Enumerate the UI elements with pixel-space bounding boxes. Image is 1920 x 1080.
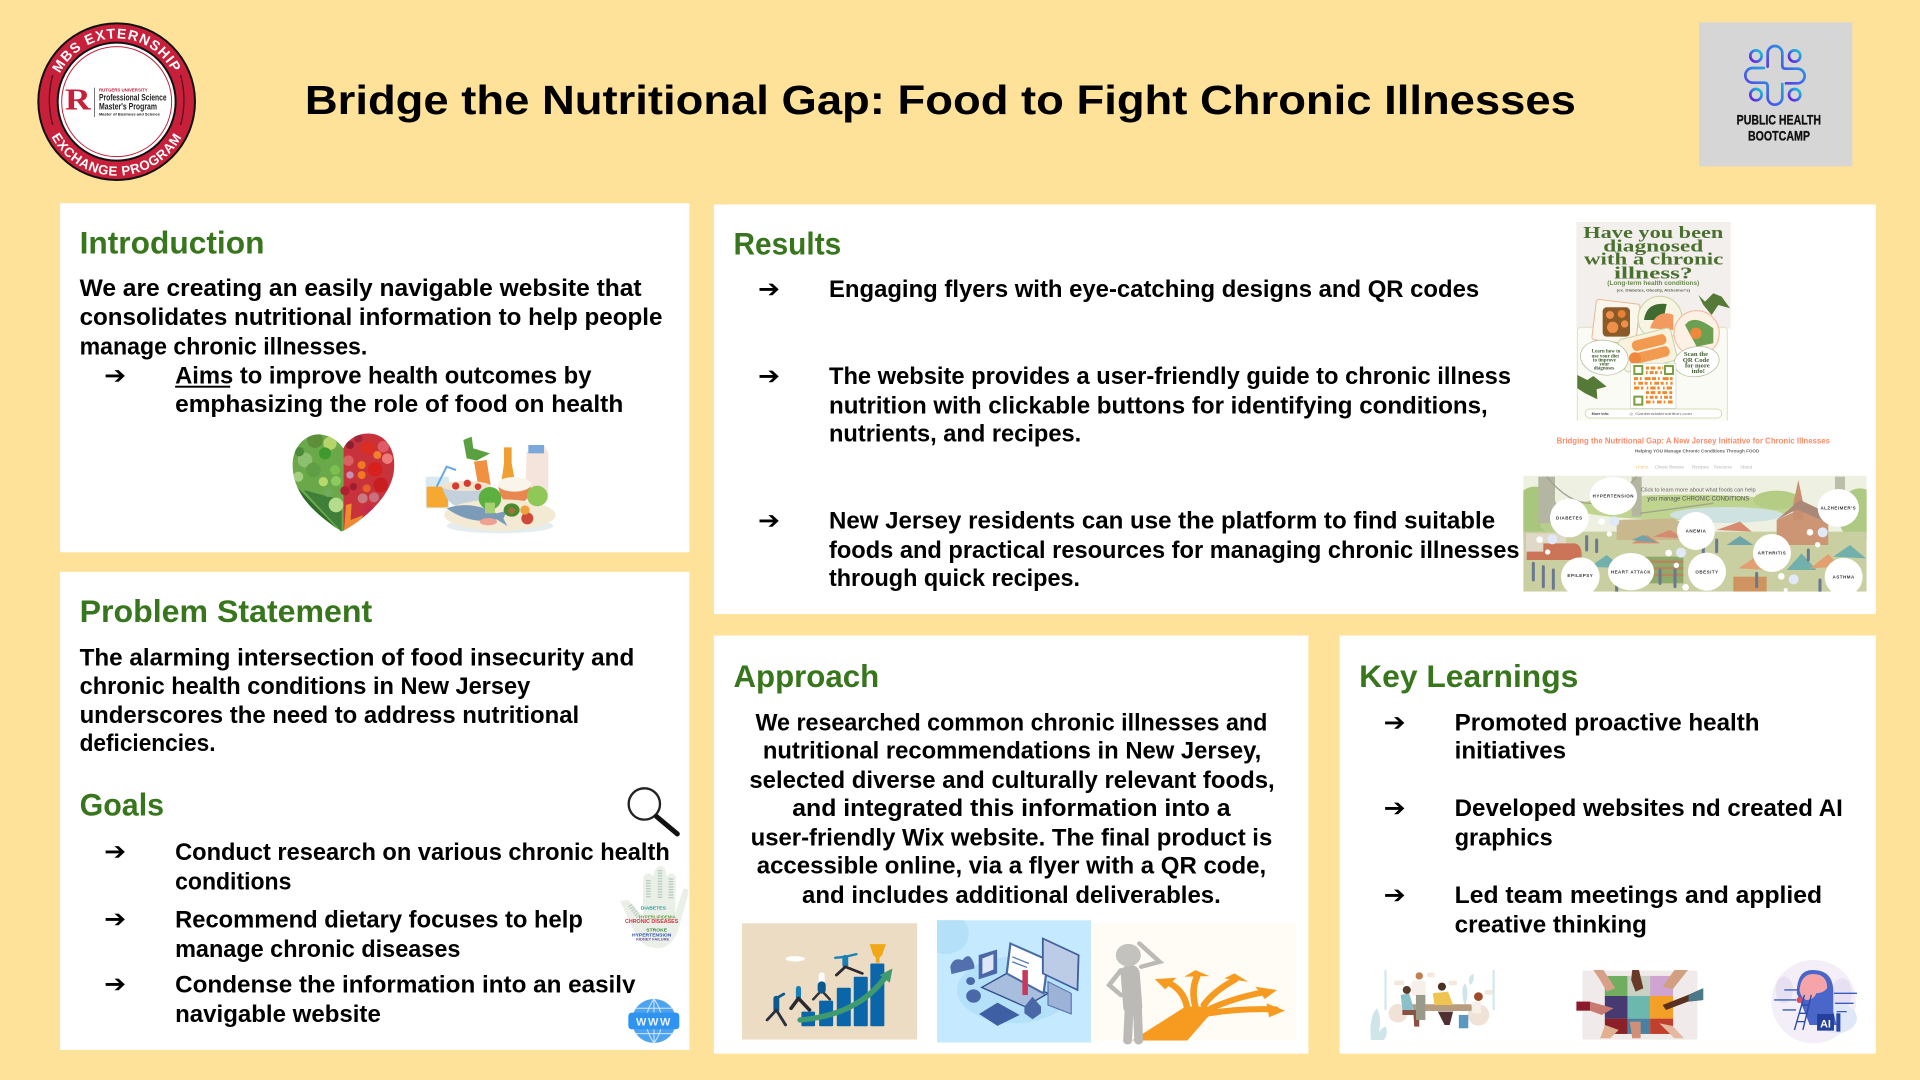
goal 1 bbox=[104, 837, 670, 896]
introduction paragraph: manage chronic illnesses. bbox=[80, 333, 367, 360]
logo: public health bootcamp: BOOTCAMP bbox=[1748, 129, 1810, 144]
introduction paragraph: We are creating an easily navigable website that bbox=[80, 275, 642, 302]
learning 1: Promoted proactive health bbox=[1455, 709, 1760, 736]
icon: chronic diseases hand bbox=[620, 866, 688, 948]
icon: chronic diseases hand: STROKE bbox=[646, 928, 668, 934]
panel: problem statement and goals bbox=[60, 572, 689, 1050]
flyer: have you been diagnosed: diagnosed bbox=[1603, 236, 1704, 255]
website screenshot: Recipes bbox=[1692, 465, 1709, 470]
result 1: ➔ bbox=[758, 274, 780, 303]
QR code bbox=[1631, 363, 1676, 408]
logo: MBS externship badge: Master's Program bbox=[99, 102, 157, 112]
website screenshot: DIABETES bbox=[1556, 516, 1583, 521]
flyer: have you been diagnosed: diagnoses bbox=[1594, 366, 1614, 371]
icon: chronic diseases hand: DIABETES bbox=[641, 905, 667, 911]
heading: key learnings: Key Learnings bbox=[1359, 658, 1578, 694]
goal 3: navigable website bbox=[175, 1001, 381, 1028]
result 2: nutrients, and recipes. bbox=[829, 420, 1081, 447]
flyer: have you been diagnosed: More Info: bbox=[1592, 412, 1609, 416]
icon: www globe: WWW bbox=[636, 1017, 672, 1029]
learning 1: ➔ bbox=[1384, 707, 1406, 736]
flyer: have you been diagnosed: illness? bbox=[1614, 263, 1693, 282]
website screenshot: About bbox=[1740, 465, 1753, 470]
illustration: team climbing bar chart bbox=[742, 923, 917, 1040]
result 1: Engaging flyers with eye-catching designs and QR codes bbox=[829, 276, 1479, 303]
heading: problem statement: Problem Statement bbox=[80, 593, 373, 629]
approach paragraph bbox=[749, 709, 1275, 909]
learning 3: ➔ bbox=[1384, 880, 1406, 909]
illustration: laptop isometric bbox=[937, 920, 1092, 1042]
website screenshot: Resources bbox=[1714, 465, 1733, 470]
flyer: have you been diagnosed: info! bbox=[1692, 368, 1705, 375]
panel: approach bbox=[714, 636, 1308, 1054]
flyer: have you been diagnosed: use your diet bbox=[1592, 354, 1619, 359]
result 3: foods and practical resources for managing chronic illnesses bbox=[829, 537, 1520, 564]
goal 1: ➔ bbox=[104, 837, 126, 866]
flyer: have you been diagnosed bbox=[1576, 222, 1731, 422]
learning 2: Developed websites nd created AI bbox=[1455, 795, 1843, 822]
results card bbox=[714, 204, 1876, 614]
website screenshot: you manage CHRONIC CONDITIONS bbox=[1647, 497, 1749, 503]
website screenshot: OBESITY bbox=[1695, 569, 1719, 574]
website screenshot: ALZHEIMER'S bbox=[1820, 506, 1856, 511]
illustration: AI brain head bbox=[1771, 960, 1857, 1043]
logo: MBS externship badge: RUTGERS UNIVERSITY bbox=[99, 88, 148, 93]
website screenshot: HYPERTENSION bbox=[1593, 494, 1634, 499]
illustration: team meeting bbox=[1370, 970, 1494, 1040]
aims bullet bbox=[175, 362, 623, 418]
result 3: through quick recipes. bbox=[829, 565, 1080, 592]
website screenshot: Chronic Illnesses bbox=[1655, 465, 1685, 470]
icon: chronic diseases hand: HYPERTENSION bbox=[632, 932, 672, 938]
website screenshot: EPILEPSY bbox=[1567, 573, 1593, 578]
approach paragraph: accessible online, via a flyer with a QR code, bbox=[757, 853, 1266, 880]
flyer: have you been diagnosed: Have you been bbox=[1583, 223, 1724, 242]
key learnings card bbox=[1340, 636, 1876, 1054]
result 3: ➔ bbox=[758, 505, 780, 534]
problem statement paragraph: The alarming intersection of food insecurity and bbox=[80, 645, 634, 672]
logo: public health bootcamp bbox=[1699, 22, 1852, 166]
approach paragraph: user-friendly Wix website. The final product is bbox=[751, 825, 1272, 852]
problem statement paragraph: underscores the need to address nutritional bbox=[80, 702, 579, 729]
flyer: have you been diagnosed: your bbox=[1599, 363, 1610, 368]
website screenshot bbox=[1523, 438, 1867, 592]
result 3: New Jersey residents can use the platform to find suitable bbox=[829, 507, 1495, 534]
learning 2 bbox=[1384, 793, 1843, 852]
website screenshot: Click to learn more about what foods can help bbox=[1641, 488, 1756, 494]
introduction paragraph bbox=[80, 275, 662, 360]
introduction card bbox=[60, 203, 689, 552]
learning 1: initiatives bbox=[1455, 738, 1566, 765]
goal 2: Recommend dietary focuses to help bbox=[175, 907, 583, 934]
icon: www globe bbox=[628, 999, 679, 1043]
icon: healthy food plate bbox=[426, 437, 556, 533]
panel: results bbox=[714, 204, 1882, 614]
icon: chronic diseases hand: CHRONIC DISEASES bbox=[625, 919, 679, 925]
result 2: nutrition with clickable buttons for identifying conditions, bbox=[829, 392, 1488, 419]
website screenshot: ASTHMA bbox=[1833, 575, 1855, 580]
flyer: have you been diagnosed: ◎ Gardenstatenutrition.com bbox=[1629, 412, 1692, 416]
problem statement paragraph: deficiencies. bbox=[80, 730, 216, 757]
learning 2: graphics bbox=[1455, 825, 1553, 852]
learning 3: creative thinking bbox=[1455, 911, 1647, 938]
goal 3 bbox=[104, 969, 643, 1028]
goal 2: ➔ bbox=[104, 904, 126, 933]
website screenshot: Helping YOU Manage Chronic Conditions Through FOOD bbox=[1635, 449, 1760, 455]
icon: magnifying glass bbox=[629, 788, 677, 834]
logo: MBS externship badge: MBS EXTERNSHIP bbox=[52, 28, 180, 73]
flyer: have you been diagnosed: (Long-term health conditions) bbox=[1607, 281, 1699, 287]
problem statement card bbox=[60, 572, 689, 1050]
logo: MBS externship badge: EXCHANGE PROGRAM bbox=[52, 132, 182, 176]
approach paragraph: and includes additional deliverables. bbox=[802, 882, 1221, 909]
title: Bridge the Nutritional Gap: Food to Fight Chronic Illnesses bbox=[305, 77, 1576, 123]
problem statement paragraph: chronic health conditions in New Jersey bbox=[80, 673, 531, 700]
flyer: have you been diagnosed: with a chronic bbox=[1584, 250, 1723, 269]
website screenshot: ANEMIA bbox=[1686, 529, 1707, 534]
logo: MBS externship badge: R bbox=[65, 82, 92, 116]
icon: chronic diseases hand: KIDNEY FAILURE bbox=[636, 936, 670, 941]
logo: MBS externship badge: Professional Science bbox=[99, 92, 167, 102]
aims bullet: emphasizing the role of food on health bbox=[175, 391, 623, 418]
flyer: have you been diagnosed: Learn how to bbox=[1592, 350, 1621, 355]
flyer: have you been diagnosed: QR Code bbox=[1683, 357, 1709, 364]
flyer: have you been diagnosed: for more bbox=[1685, 363, 1710, 370]
arrow bullet: ➔ bbox=[104, 360, 126, 389]
result 2: ➔ bbox=[758, 361, 780, 390]
heading: results: Results bbox=[733, 226, 841, 262]
website hero scene bbox=[1512, 476, 1882, 592]
aims bullet: Aims to improve health outcomes by bbox=[175, 362, 592, 389]
logo: MBS externship badge: Master of Business and Science bbox=[99, 112, 161, 117]
approach paragraph: We researched common chronic illnesses and bbox=[756, 709, 1267, 736]
learning 3 bbox=[1384, 880, 1822, 938]
heading: goals: Goals bbox=[80, 787, 164, 823]
learning 2: ➔ bbox=[1384, 793, 1406, 822]
website screenshot: Bridging the Nutritional Gap: A New Jersey Initiative for Chronic Illnesses bbox=[1557, 436, 1831, 445]
goal 2: manage chronic diseases bbox=[175, 936, 460, 963]
website screenshot: Home bbox=[1636, 465, 1649, 470]
panel: key learnings bbox=[1340, 636, 1876, 1054]
approach paragraph: and integrated this information into a bbox=[792, 795, 1231, 822]
approach card bbox=[714, 636, 1308, 1054]
goal 3: ➔ bbox=[104, 969, 126, 998]
illustration: puzzle hands bbox=[1576, 970, 1703, 1040]
result 3 bbox=[758, 505, 1520, 592]
goal 2 bbox=[104, 904, 583, 963]
flyer: have you been diagnosed: (ex. Diabetes, Obesity, Alzheimer's) bbox=[1617, 287, 1691, 292]
icon: heart of vegetables bbox=[290, 430, 397, 533]
illustration: figure choosing arrows bbox=[1091, 923, 1296, 1041]
flyer: have you been diagnosed: to improve bbox=[1593, 359, 1617, 364]
approach paragraph: nutritional recommendations in New Jersey, bbox=[763, 738, 1261, 765]
heading: approach: Approach bbox=[733, 658, 879, 694]
approach paragraph: selected diverse and culturally relevant foods, bbox=[749, 767, 1275, 794]
panel: introduction bbox=[60, 203, 689, 552]
website screenshot: HEART ATTACK bbox=[1611, 569, 1651, 574]
goal 3: Condense the information into an easily bbox=[175, 971, 636, 998]
illustration: AI brain head: AI bbox=[1820, 1018, 1831, 1030]
logo: public health bootcamp: PUBLIC HEALTH bbox=[1737, 112, 1821, 127]
learning 1 bbox=[1384, 707, 1760, 765]
website screenshot: ARTHRITIS bbox=[1758, 551, 1786, 556]
goal 1: Conduct research on various chronic health bbox=[175, 839, 670, 866]
goal 1: conditions bbox=[175, 869, 291, 896]
introduction paragraph: consolidates nutritional information to help people bbox=[80, 304, 662, 331]
icon: chronic diseases hand: HYPERLIPIDEMIA bbox=[639, 914, 677, 919]
flyer: have you been diagnosed: Scan the bbox=[1684, 351, 1708, 358]
heading: introduction: Introduction bbox=[80, 224, 264, 260]
logo: MBS externship badge bbox=[37, 22, 196, 181]
problem statement paragraph bbox=[80, 645, 634, 757]
result 2 bbox=[758, 361, 1511, 447]
learning 3: Led team meetings and applied bbox=[1455, 882, 1822, 909]
result 2: The website provides a user-friendly guide to chronic illness bbox=[829, 363, 1511, 390]
